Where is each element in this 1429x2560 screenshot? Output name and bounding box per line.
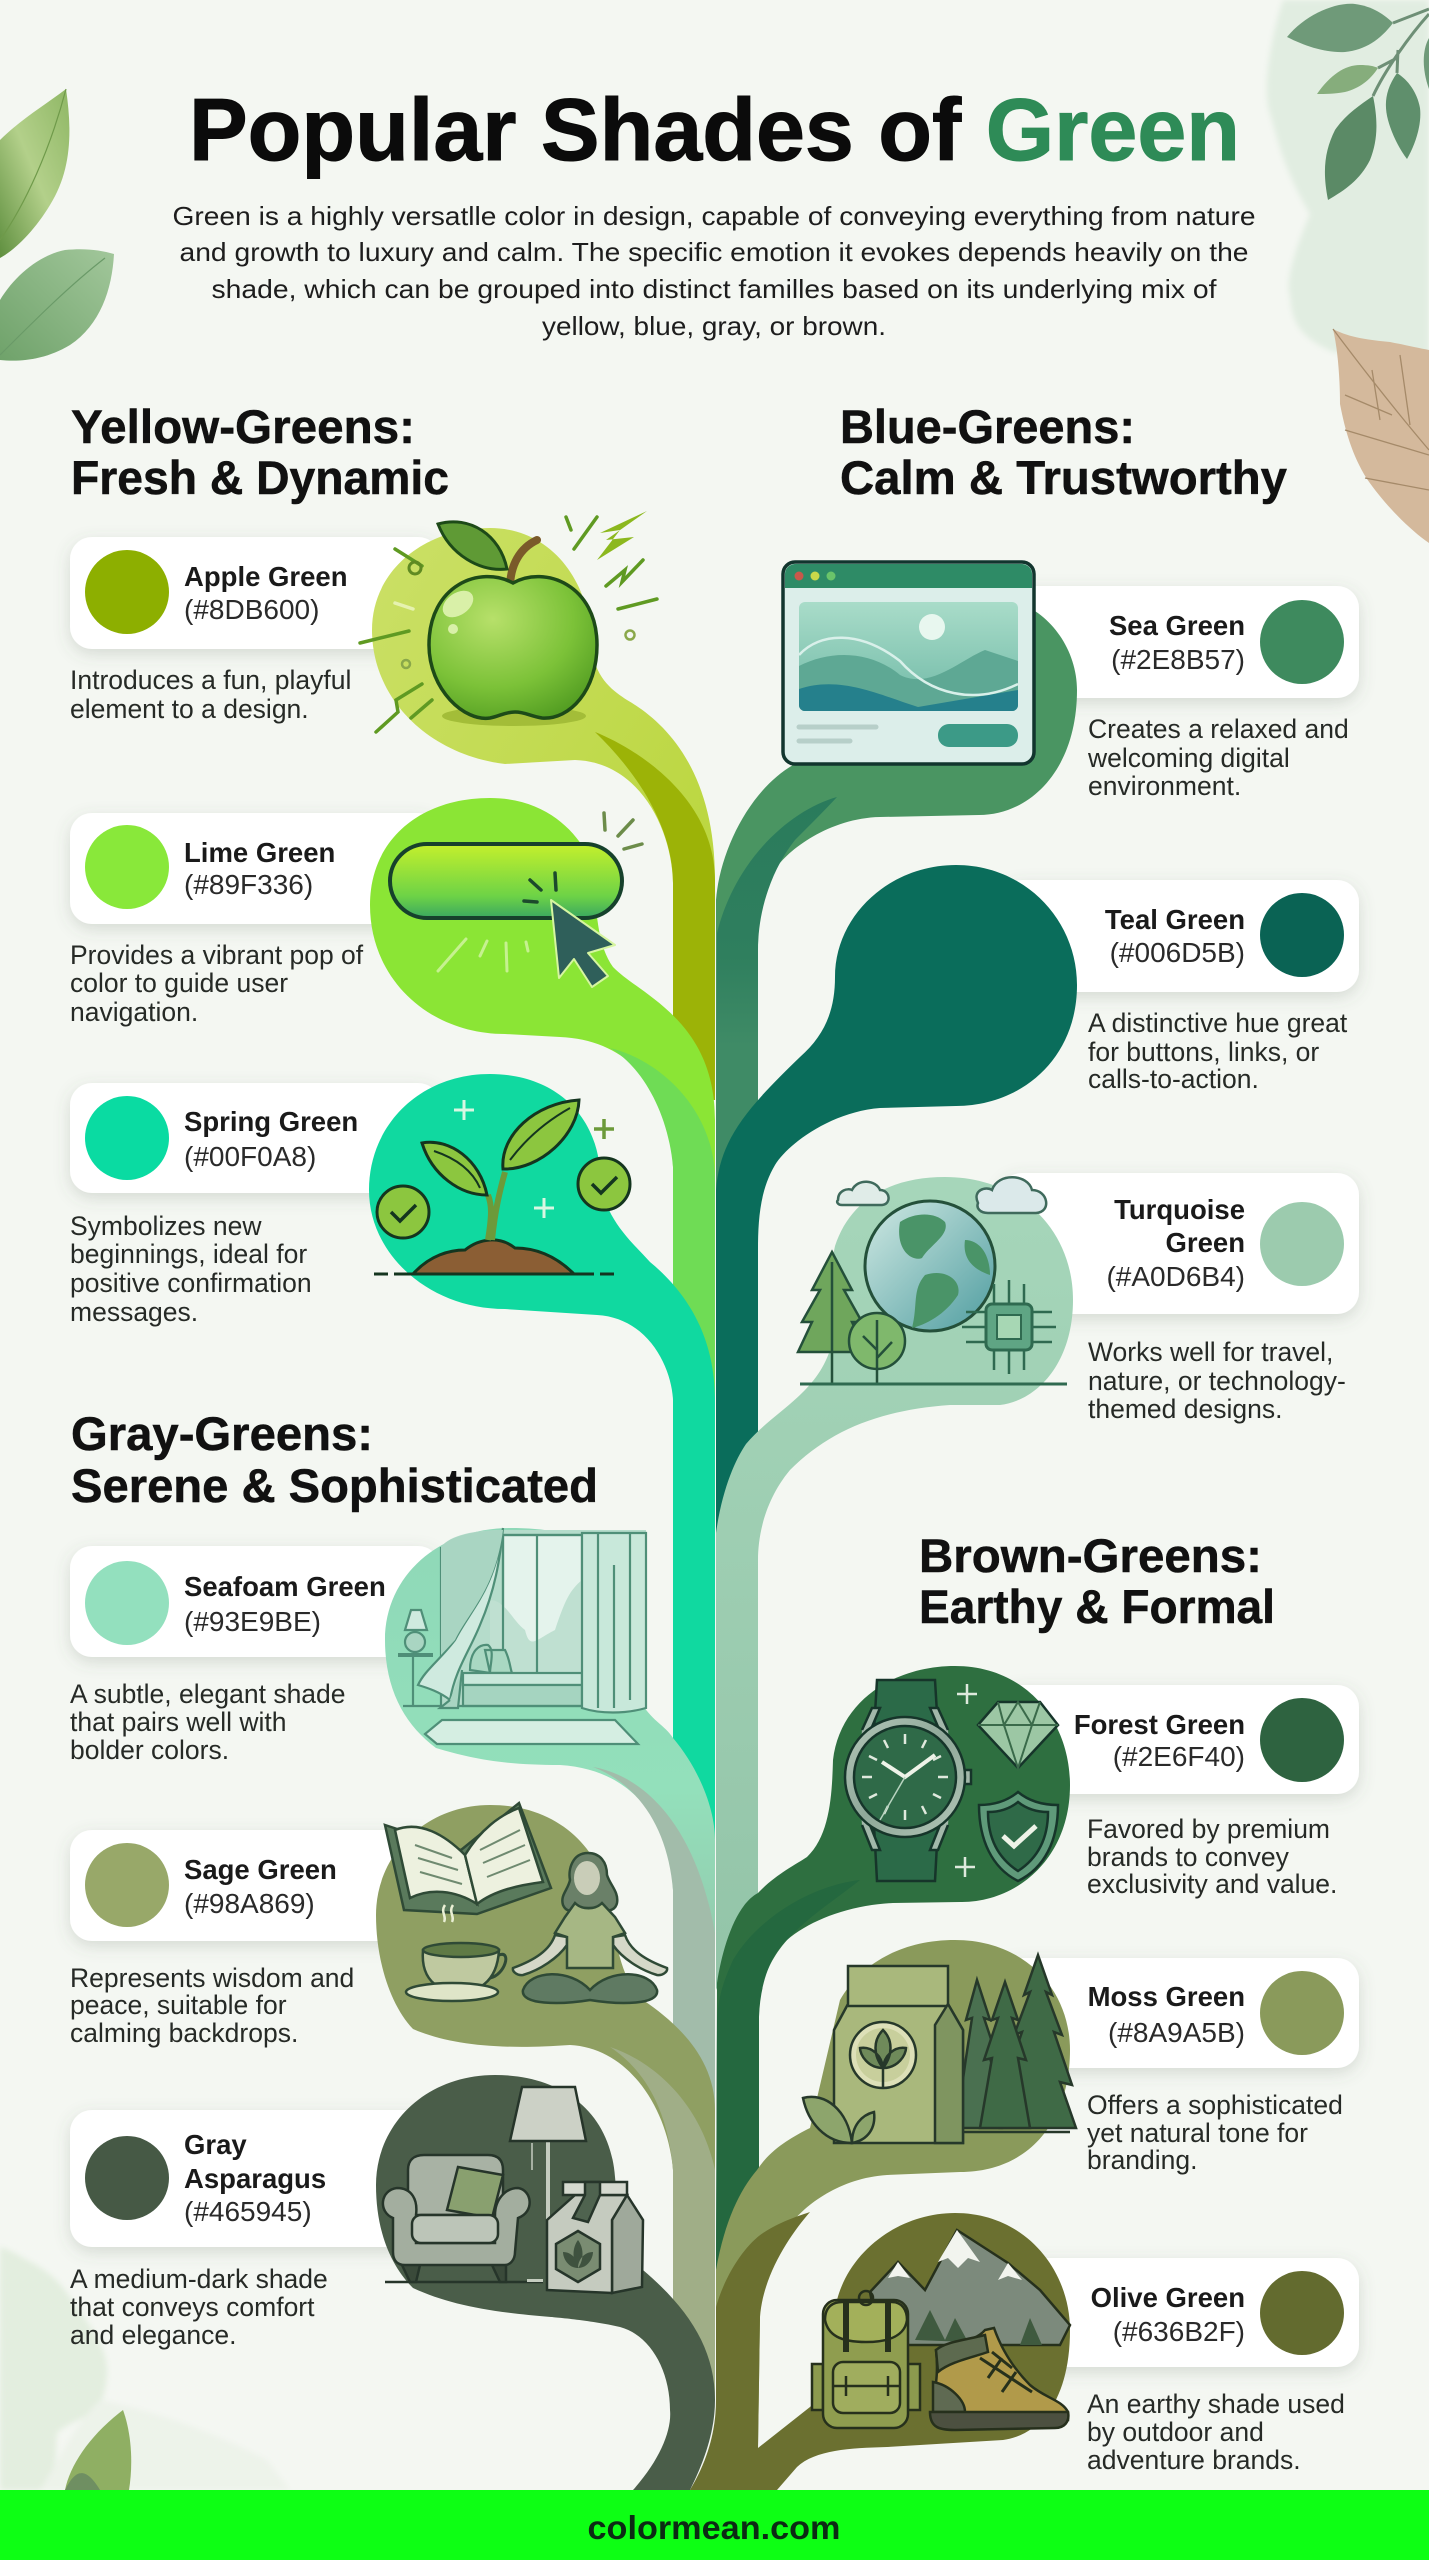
icon: button and cursor [390, 813, 642, 987]
description: color to guide user [70, 968, 288, 998]
panel: gray asparagus [70, 2075, 715, 2490]
heading: gray-greens: Serene & Sophisticated [71, 1459, 598, 1512]
card [70, 1083, 440, 1193]
card [1000, 2258, 1359, 2367]
swatch [85, 1096, 169, 1180]
description: that pairs well with [70, 1707, 287, 1737]
icon: mountains, backpack and boot [812, 2230, 1070, 2430]
card [70, 1546, 440, 1657]
section: gray-greens [70, 1407, 715, 2490]
description: themed designs. [1088, 1394, 1282, 1424]
hex: (#8A9A5B) [1108, 2017, 1245, 2048]
description: that conveys comfort [70, 2292, 315, 2322]
description: A distinctive hue great [1088, 1008, 1348, 1038]
name: Apple Green [184, 561, 348, 592]
swatch [1260, 1698, 1344, 1782]
description [1088, 1337, 1346, 1424]
panel: teal green [716, 865, 1359, 1540]
heading: yellow-greens [71, 400, 449, 504]
card [1000, 1958, 1359, 2068]
heading: yellow-greens: Fresh & Dynamic [71, 451, 449, 504]
intro paragraph [172, 201, 1256, 341]
description: calming backdrops. [70, 2018, 298, 2048]
description [1087, 1814, 1337, 1899]
name [1114, 1194, 1245, 1258]
hex: (#8DB600) [184, 594, 319, 625]
card [1000, 880, 1359, 992]
description: A subtle, elegant shade [70, 1679, 346, 1709]
name [184, 2129, 326, 2194]
swatch [1260, 2271, 1344, 2355]
description: exclusivity and value. [1087, 1869, 1337, 1899]
icon: bedroom window [398, 1528, 646, 1744]
watercolor wash: bottom left [0, 2247, 290, 2490]
swatch [1260, 1971, 1344, 2055]
intro paragraph: Green is a highly versatlle color in design, capable of conveying everything from nature [172, 201, 1256, 231]
panel: olive green [690, 2212, 1359, 2490]
title: Popular Shades of Green [189, 80, 1240, 179]
green leaves: top left [0, 89, 114, 361]
intro paragraph: shade, which can be grouped into distinct familles based on its underlying mix of [212, 274, 1217, 304]
branch [376, 2075, 715, 2490]
description: adventure brands. [1087, 2445, 1301, 2475]
heading: blue-greens: Calm & Trustworthy [840, 451, 1287, 504]
description [70, 1211, 312, 1327]
hex: (#006D5B) [1110, 937, 1245, 968]
hex: (#2E6F40) [1113, 1741, 1245, 1772]
description: messages. [70, 1297, 198, 1327]
description [1087, 2389, 1345, 2475]
description [70, 2264, 328, 2350]
description: A medium-dark shade [70, 2264, 328, 2294]
card [70, 1830, 440, 1941]
card [1000, 1173, 1359, 1314]
description: element to a design. [70, 694, 309, 724]
branch [716, 1177, 1073, 1990]
hex: (#00F0A8) [184, 1141, 316, 1172]
swatch [1260, 1202, 1344, 1286]
watercolor wash: top right [1267, 0, 1429, 360]
hex: (#93E9BE) [184, 1606, 321, 1637]
hex: (#89F336) [184, 869, 313, 900]
heading: yellow-greens: Yellow-Greens: [71, 400, 415, 453]
description [70, 665, 351, 724]
card [1000, 586, 1359, 698]
description [70, 940, 364, 1027]
hex: (#2E8B57) [1111, 644, 1245, 675]
heading: gray-greens: Gray-Greens: [71, 1407, 373, 1460]
hex: (#465945) [184, 2196, 312, 2227]
panel: sage green [70, 1803, 715, 2400]
description: bolder colors. [70, 1735, 229, 1765]
description: positive confirmation [70, 1268, 312, 1298]
name: Moss Green [1088, 1981, 1245, 2012]
panel: apple green [70, 511, 715, 1100]
footer banner: colormean.com [588, 2509, 840, 2546]
heading: gray-greens [71, 1407, 598, 1512]
hex: (#98A869) [184, 1888, 315, 1919]
swatch [85, 1843, 169, 1927]
description: beginnings, ideal for [70, 1239, 307, 1269]
description: An earthy shade used [1087, 2389, 1345, 2419]
intro paragraph: and growth to luxury and calm. The specific emotion it evokes depends heavily on the [180, 237, 1248, 267]
branch [369, 1074, 715, 1840]
intro paragraph: yellow, blue, gray, or brown. [542, 311, 886, 341]
description: peace, suitable for [70, 1990, 287, 2020]
description: for buttons, links, or [1088, 1037, 1319, 1067]
description: environment. [1088, 771, 1241, 801]
panel: seafoam green [70, 1528, 715, 2110]
name: Lime Green [184, 837, 335, 868]
heading: brown-greens: Brown-Greens: [919, 1529, 1262, 1582]
branch [716, 1666, 1070, 2270]
name: Olive Green [1091, 2282, 1245, 2313]
description: Creates a relaxed and [1088, 714, 1349, 744]
swatch [1260, 600, 1344, 684]
description: Introduces a fun, playful [70, 665, 351, 695]
description: Favored by premium [1087, 1814, 1330, 1844]
description [1087, 714, 1349, 801]
icon: watch, diamond and shield [845, 1680, 1058, 1881]
heading: brown-greens [919, 1529, 1275, 1633]
description: Offers a sophisticated [1087, 2090, 1343, 2120]
branch [716, 600, 1077, 1190]
description: Provides a vibrant pop of [70, 940, 364, 970]
description: and elegance. [70, 2320, 237, 2350]
card [70, 813, 440, 924]
swatch [1260, 893, 1344, 977]
icon: browser window [783, 562, 1034, 764]
description [1087, 2090, 1343, 2175]
name: Seafoam Green [184, 1571, 386, 1602]
icon: armchair, lamp and package [383, 2087, 643, 2293]
branch [690, 2212, 1070, 2490]
hex: (#636B2F) [1113, 2316, 1245, 2347]
description [1088, 1008, 1348, 1094]
heading: brown-greens: Earthy & Formal [919, 1580, 1275, 1633]
branch [372, 528, 715, 1100]
section: brown-greens [690, 1529, 1359, 2490]
description: Symbolizes new [70, 1211, 262, 1241]
description: yet natural tone for [1087, 2118, 1308, 2148]
card [1000, 1685, 1359, 1794]
hex: (#A0D6B4) [1106, 1261, 1245, 1292]
dry brown leaf: right edge [1333, 329, 1429, 543]
heading: blue-greens [840, 400, 1287, 504]
description: brands to convey [1087, 1842, 1290, 1872]
section: blue-greens [716, 400, 1359, 1990]
panel: forest green [716, 1666, 1359, 2270]
name: Spring Green [184, 1106, 358, 1137]
swatch [85, 825, 169, 909]
description: calls-to-action. [1088, 1064, 1259, 1094]
icon: globe, trees and chip [798, 1177, 1067, 1385]
name: Sea Green [1109, 610, 1245, 641]
name: Sage Green [184, 1854, 337, 1885]
card [70, 2110, 440, 2247]
description: Works well for travel, [1088, 1337, 1333, 1367]
icon: sprout [374, 1100, 630, 1274]
name: Turquoise [1114, 1194, 1245, 1225]
panel: sea green [716, 562, 1359, 1190]
footer banner [0, 2490, 1429, 2560]
swatch [85, 550, 169, 634]
panel: lime green [70, 798, 715, 1400]
icon: apple [360, 511, 657, 732]
branch [716, 1940, 1070, 2448]
branch [370, 798, 715, 1400]
branch [376, 1805, 715, 2400]
description: welcoming digital [1087, 743, 1290, 773]
description: navigation. [70, 997, 198, 1027]
description: nature, or technology- [1088, 1366, 1346, 1396]
heading: blue-greens: Blue-Greens: [840, 400, 1135, 453]
leaf cluster: top right branch [1287, 4, 1429, 200]
name: Green [1166, 1227, 1245, 1258]
leaf: bottom left [65, 2410, 131, 2490]
description: by outdoor and [1087, 2417, 1264, 2447]
name: Gray [184, 2129, 247, 2160]
card [70, 537, 440, 649]
description [70, 1963, 354, 2048]
swatch [85, 2136, 169, 2220]
panel: spring green [70, 1074, 715, 1840]
icon: package and pine trees [803, 1955, 1076, 2143]
description: branding. [1087, 2145, 1198, 2175]
panel: moss green [716, 1940, 1359, 2448]
icon: book, tea and meditation [385, 1803, 667, 2003]
name: Teal Green [1105, 904, 1245, 935]
panel: turquoise green [716, 1173, 1359, 1990]
branch and empty blob [716, 865, 1077, 1540]
swatch [85, 1561, 169, 1645]
branch [385, 1528, 715, 2110]
description [70, 1679, 346, 1765]
section: yellow-greens [70, 400, 715, 1840]
name: Asparagus [184, 2163, 326, 2194]
name: Forest Green [1074, 1709, 1245, 1740]
description: Represents wisdom and [70, 1963, 354, 1993]
